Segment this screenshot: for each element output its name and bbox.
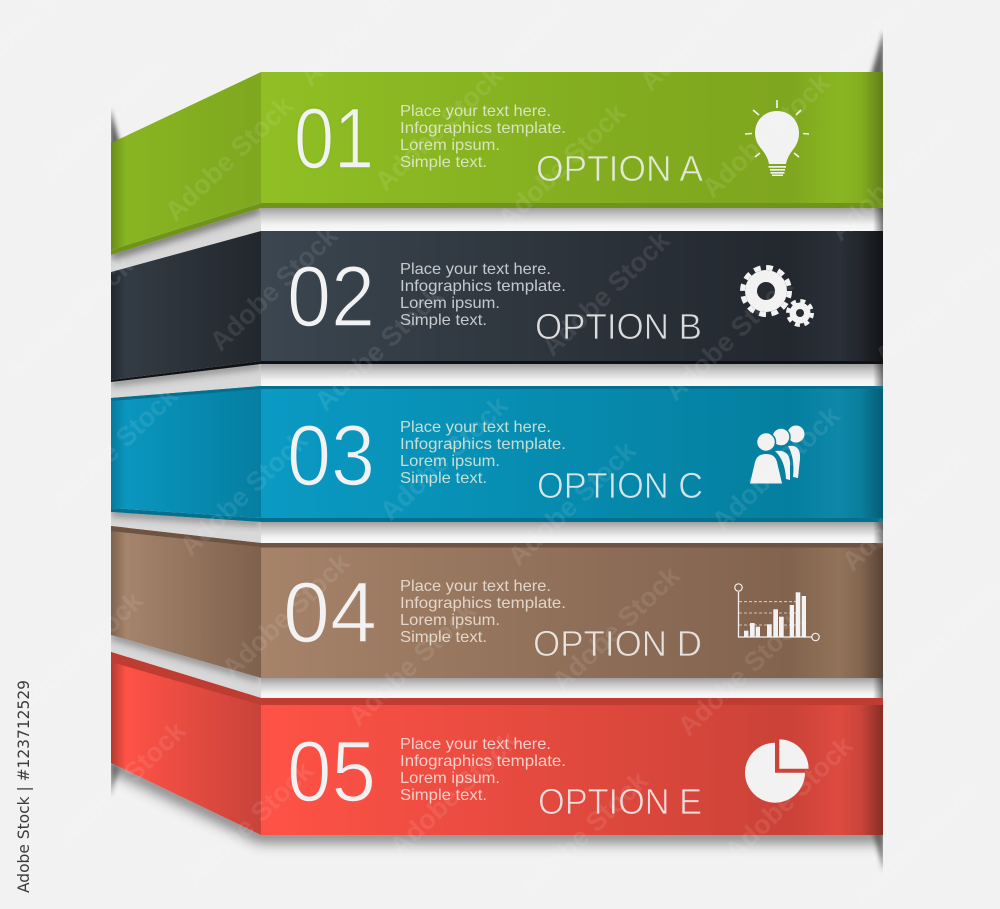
watermark: Adobe Stock: [0, 250, 139, 387]
text block E: Place your text here.: [400, 736, 551, 753]
watermark: Adobe Stock: [159, 90, 299, 227]
icon: gears: [742, 268, 812, 325]
icon: bar chart: [735, 584, 819, 641]
watermark: Adobe Stock: [369, 60, 509, 197]
watermark: Adobe Stock: [216, 547, 356, 684]
text block E: Simple text.: [400, 787, 487, 804]
text block C: Place your text here.: [400, 419, 551, 436]
icon: people: [750, 426, 804, 484]
watermark: Adobe Stock: [34, 50, 174, 187]
watermark: Adobe Stock: [546, 560, 686, 697]
text block D: Simple text.: [400, 629, 487, 646]
text block C: Lorem ipsum.: [400, 453, 500, 470]
text block B: Simple text.: [400, 312, 487, 329]
number 02: 02: [287, 249, 375, 345]
text block B: Place your text here.: [400, 261, 551, 278]
watermark: Adobe Stock: [309, 280, 449, 417]
heading: option B: OPTION B: [535, 306, 702, 347]
watermark: Adobe Stock: [52, 715, 192, 852]
text block C: Infographics template.: [400, 436, 566, 453]
text block E: Infographics template.: [400, 753, 566, 770]
panel: option D: [111, 526, 883, 678]
text block A: [400, 103, 566, 171]
watermark: Adobe Stock: [179, 755, 319, 892]
watermark: Adobe Stock: [719, 730, 859, 867]
watermark: Adobe Stock: [536, 225, 676, 362]
watermark: Adobe Stock: [174, 425, 314, 562]
heading: option C: OPTION C: [537, 465, 703, 506]
text block B: [400, 261, 566, 329]
watermark: Adobe Stock: [492, 97, 632, 234]
watermark: Adobe Stock: [44, 380, 184, 517]
number 04: 04: [283, 565, 377, 661]
text block E: Lorem ipsum.: [400, 770, 500, 787]
watermark: Adobe Stock: [706, 400, 846, 537]
watermark: Adobe Stock: [846, 775, 986, 909]
fold shadows along the page slits: [110, 30, 884, 872]
number 05: 05: [287, 724, 376, 820]
text block D: [400, 578, 566, 646]
text block A: Place your text here.: [400, 103, 551, 120]
watermark: Adobe Stock: [672, 605, 812, 742]
text block D: Place your text here.: [400, 578, 551, 595]
text block D: Infographics template.: [400, 595, 566, 612]
panel: option A: [111, 72, 883, 255]
text block D: Lorem ipsum.: [400, 612, 500, 629]
watermark: Adobe Stock: [374, 390, 514, 527]
watermark: Adobe Stock: [9, 585, 149, 722]
heading: option D: OPTION D: [533, 623, 702, 664]
watermark: Adobe Stock: [824, 110, 964, 247]
text block B: Infographics template.: [400, 278, 566, 295]
heading: option E: OPTION E: [538, 781, 702, 822]
watermark: Adobe Stock: [384, 725, 524, 862]
heading: option A: OPTION A: [536, 148, 703, 189]
gaps between bands: [111, 207, 883, 699]
icon: pie chart: [745, 739, 809, 803]
side credit text: Adobe Stock | #123712529: [14, 680, 33, 893]
watermark: Adobe Stock: [659, 270, 799, 407]
panel: option E: [111, 652, 883, 835]
watermark: Adobe Stock: [502, 435, 642, 572]
text block E: [400, 736, 566, 804]
panel: option B: [111, 231, 883, 382]
text block C: Simple text.: [400, 470, 487, 487]
watermark: Adobe Stock: [204, 220, 344, 357]
text block C: [400, 419, 566, 487]
watermark: Adobe Stock: [836, 440, 976, 577]
watermark: Adobe Stock: [514, 765, 654, 902]
text block A: Infographics template.: [400, 120, 566, 137]
number 03: 03: [287, 408, 375, 504]
text block A: Lorem ipsum.: [400, 137, 500, 154]
number 01: 01: [294, 91, 374, 187]
text block B: Lorem ipsum.: [400, 295, 500, 312]
watermark: Adobe Stock: [696, 67, 836, 204]
icon: light bulb: [745, 100, 809, 176]
watermark: Adobe Stock: [342, 595, 482, 732]
panel: option C: [111, 386, 883, 522]
text block A: Simple text.: [400, 154, 487, 171]
